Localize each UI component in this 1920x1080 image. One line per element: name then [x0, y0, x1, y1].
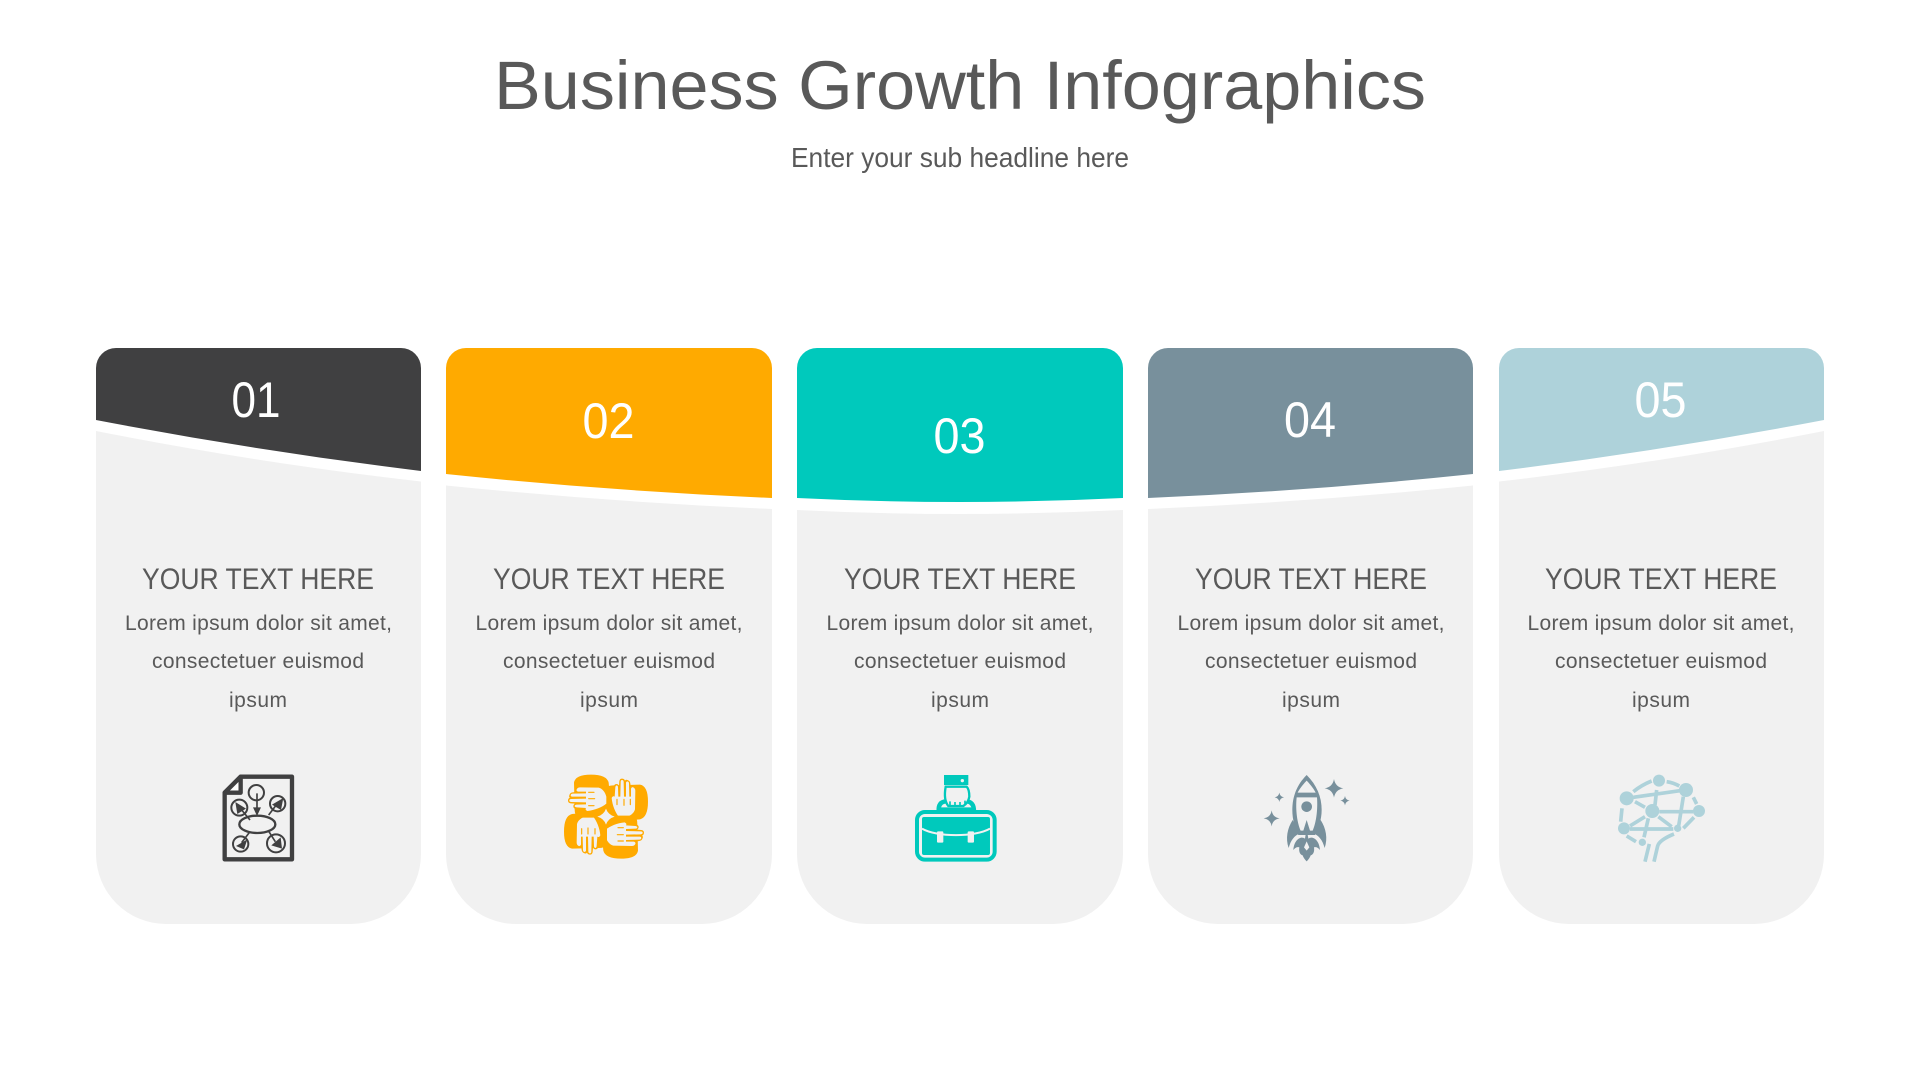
- panel: card 04: [1148, 348, 1473, 924]
- icon: briefcase in hand: [917, 775, 995, 860]
- card 03 text: ipsum: [931, 689, 989, 712]
- icon: document mind map: [225, 777, 292, 859]
- card 01 text: Lorem ipsum dolor sit amet,: [125, 612, 392, 635]
- card 04 text: [1178, 612, 1444, 712]
- card 04 text: consectetuer euismod: [1205, 650, 1417, 673]
- card 02 number: 02: [582, 393, 634, 449]
- card 05 text: [1528, 612, 1794, 712]
- card 02 text: [476, 612, 742, 712]
- title: Business Growth Infographics: [494, 47, 1426, 124]
- icon: brain network: [1618, 775, 1705, 862]
- card 02 text: consectetuer euismod: [503, 650, 715, 673]
- card 05 text: Lorem ipsum dolor sit amet,: [1528, 612, 1794, 635]
- card 02 heading: YOUR TEXT HERE: [493, 563, 725, 596]
- card 03 body: [797, 510, 1123, 924]
- card 01 text: ipsum: [229, 689, 287, 712]
- card 02 text: ipsum: [580, 689, 638, 712]
- card 01 text: [125, 612, 392, 712]
- panel: card 02: [446, 348, 772, 924]
- card 05 text: ipsum: [1632, 689, 1690, 712]
- card 05 heading: YOUR TEXT HERE: [1545, 563, 1777, 596]
- card 05 text: consectetuer euismod: [1555, 650, 1767, 673]
- card 05 number: 05: [1634, 372, 1686, 428]
- icon: joined hands: [564, 775, 648, 859]
- card 01 header: [96, 348, 421, 471]
- card 02 header: [446, 348, 772, 498]
- card 04 text: Lorem ipsum dolor sit amet,: [1178, 612, 1444, 635]
- card 03 text: consectetuer euismod: [854, 650, 1066, 673]
- card 05 header: [1499, 348, 1824, 471]
- card 01 number: 01: [232, 372, 280, 428]
- card 05 body: [1499, 431, 1824, 924]
- panel: card 03: [797, 348, 1123, 924]
- card 02 text: Lorem ipsum dolor sit amet,: [476, 612, 742, 635]
- card 03 header: [797, 348, 1123, 502]
- icon: rocket: [1264, 775, 1350, 861]
- card 01 body: [96, 431, 421, 924]
- card 04 body: [1148, 486, 1473, 924]
- card 03 heading: YOUR TEXT HERE: [844, 563, 1076, 596]
- panel: card 01: [96, 348, 421, 924]
- card 03 number: 03: [934, 408, 986, 464]
- subtitle: Enter your sub headline here: [791, 142, 1129, 173]
- card 03 text: Lorem ipsum dolor sit amet,: [826, 612, 1094, 635]
- card 04 text: ipsum: [1282, 689, 1340, 712]
- panel: card 05: [1499, 348, 1824, 924]
- card 03 text: [826, 612, 1094, 712]
- card 04 number: 04: [1284, 392, 1336, 448]
- card 01 heading: YOUR TEXT HERE: [142, 563, 374, 596]
- card 04 heading: YOUR TEXT HERE: [1195, 563, 1427, 596]
- card 01 text: consectetuer euismod: [152, 650, 364, 673]
- card 04 header: [1148, 348, 1473, 498]
- card 02 body: [446, 486, 772, 924]
